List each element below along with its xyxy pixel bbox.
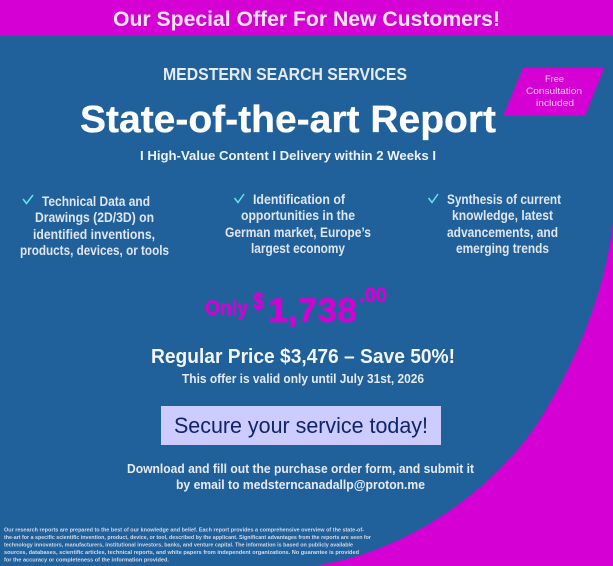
feature 3: synthesis of knowledge [428, 192, 561, 256]
feature 3: synthesis of knowledge: emerging trends [456, 241, 549, 256]
offer price: 1,738 [268, 292, 357, 330]
feature 2: market opportunities [225, 192, 371, 256]
feature 2: market opportunities: opportunities in the [241, 208, 355, 223]
feature 2: market opportunities: Identification of [253, 192, 345, 207]
icon: check mark [234, 194, 244, 202]
disclaimer: Our research reports are prepared to the best of our knowledge and belief. Each report provides a comprehensive overview of the state-of- [4, 528, 364, 534]
badge: free consultation: included [536, 98, 574, 109]
feature 1: technical data: Technical Data and [42, 194, 150, 209]
feature 1: technical data: identified inventions, [33, 227, 155, 242]
main title: State-of-the-art Report [80, 99, 496, 141]
feature 1: technical data [20, 194, 169, 258]
feature 3: synthesis of knowledge: knowledge, latest [452, 208, 553, 223]
feature 3: synthesis of knowledge: Synthesis of current [447, 192, 561, 207]
validity note: This offer is valid only until July 31st, 2026 [182, 372, 424, 386]
offer price: .00 [359, 284, 387, 307]
feature 2: market opportunities: largest economy [251, 241, 345, 256]
instructions [127, 461, 475, 492]
disclaimer: the-art for a specific scientific invention, product, device, or tool, described by the applicant. Significant advantages from the reports are seen for [4, 535, 372, 541]
icon: check mark [428, 194, 438, 202]
header banner [0, 0, 613, 36]
icon: check mark [23, 195, 33, 204]
feature 3: synthesis of knowledge: advancements, and [447, 225, 558, 240]
instructions: Download and fill out the purchase order form, and submit it [127, 461, 475, 476]
disclaimer: sources, databases, scientific articles, technical reports, and white papers from independent organizations. No guarantee is provided [4, 550, 359, 556]
regular price: Regular Price $3,476 – Save 50%! [151, 345, 455, 368]
instructions: by email to medsterncanadallp@proton.me [176, 477, 425, 492]
call to action button [161, 406, 441, 445]
offer price: Only [205, 297, 248, 320]
badge: free consultation: Free [545, 74, 564, 85]
badge: free consultation: Consultation [526, 86, 582, 97]
offer price: $ [253, 288, 265, 315]
feature 2: market opportunities: German market, Europe’s [225, 225, 371, 240]
header title: Our Special Offer For New Customers! [113, 8, 500, 31]
subtitle: I High-Value Content I Delivery within 2 Weeks I [140, 149, 436, 163]
disclaimer: technology innovators, manufacturers, institutional investors, banks, and venture capital. The information is based on publicly available [4, 542, 353, 548]
disclaimer: for the accuracy or completeness of the information provided. [4, 558, 169, 564]
magenta corner curve [313, 223, 613, 566]
company name: MEDSTERN SEARCH SERVICES [163, 64, 407, 84]
badge: free consultation [503, 68, 604, 116]
feature 1: technical data: products, devices, or tools [20, 243, 169, 258]
call to action button: Secure your service today! [174, 413, 428, 438]
feature 1: technical data: Drawings (2D/3D) on [35, 210, 154, 225]
disclaimer [4, 528, 372, 564]
offer price [205, 284, 387, 330]
